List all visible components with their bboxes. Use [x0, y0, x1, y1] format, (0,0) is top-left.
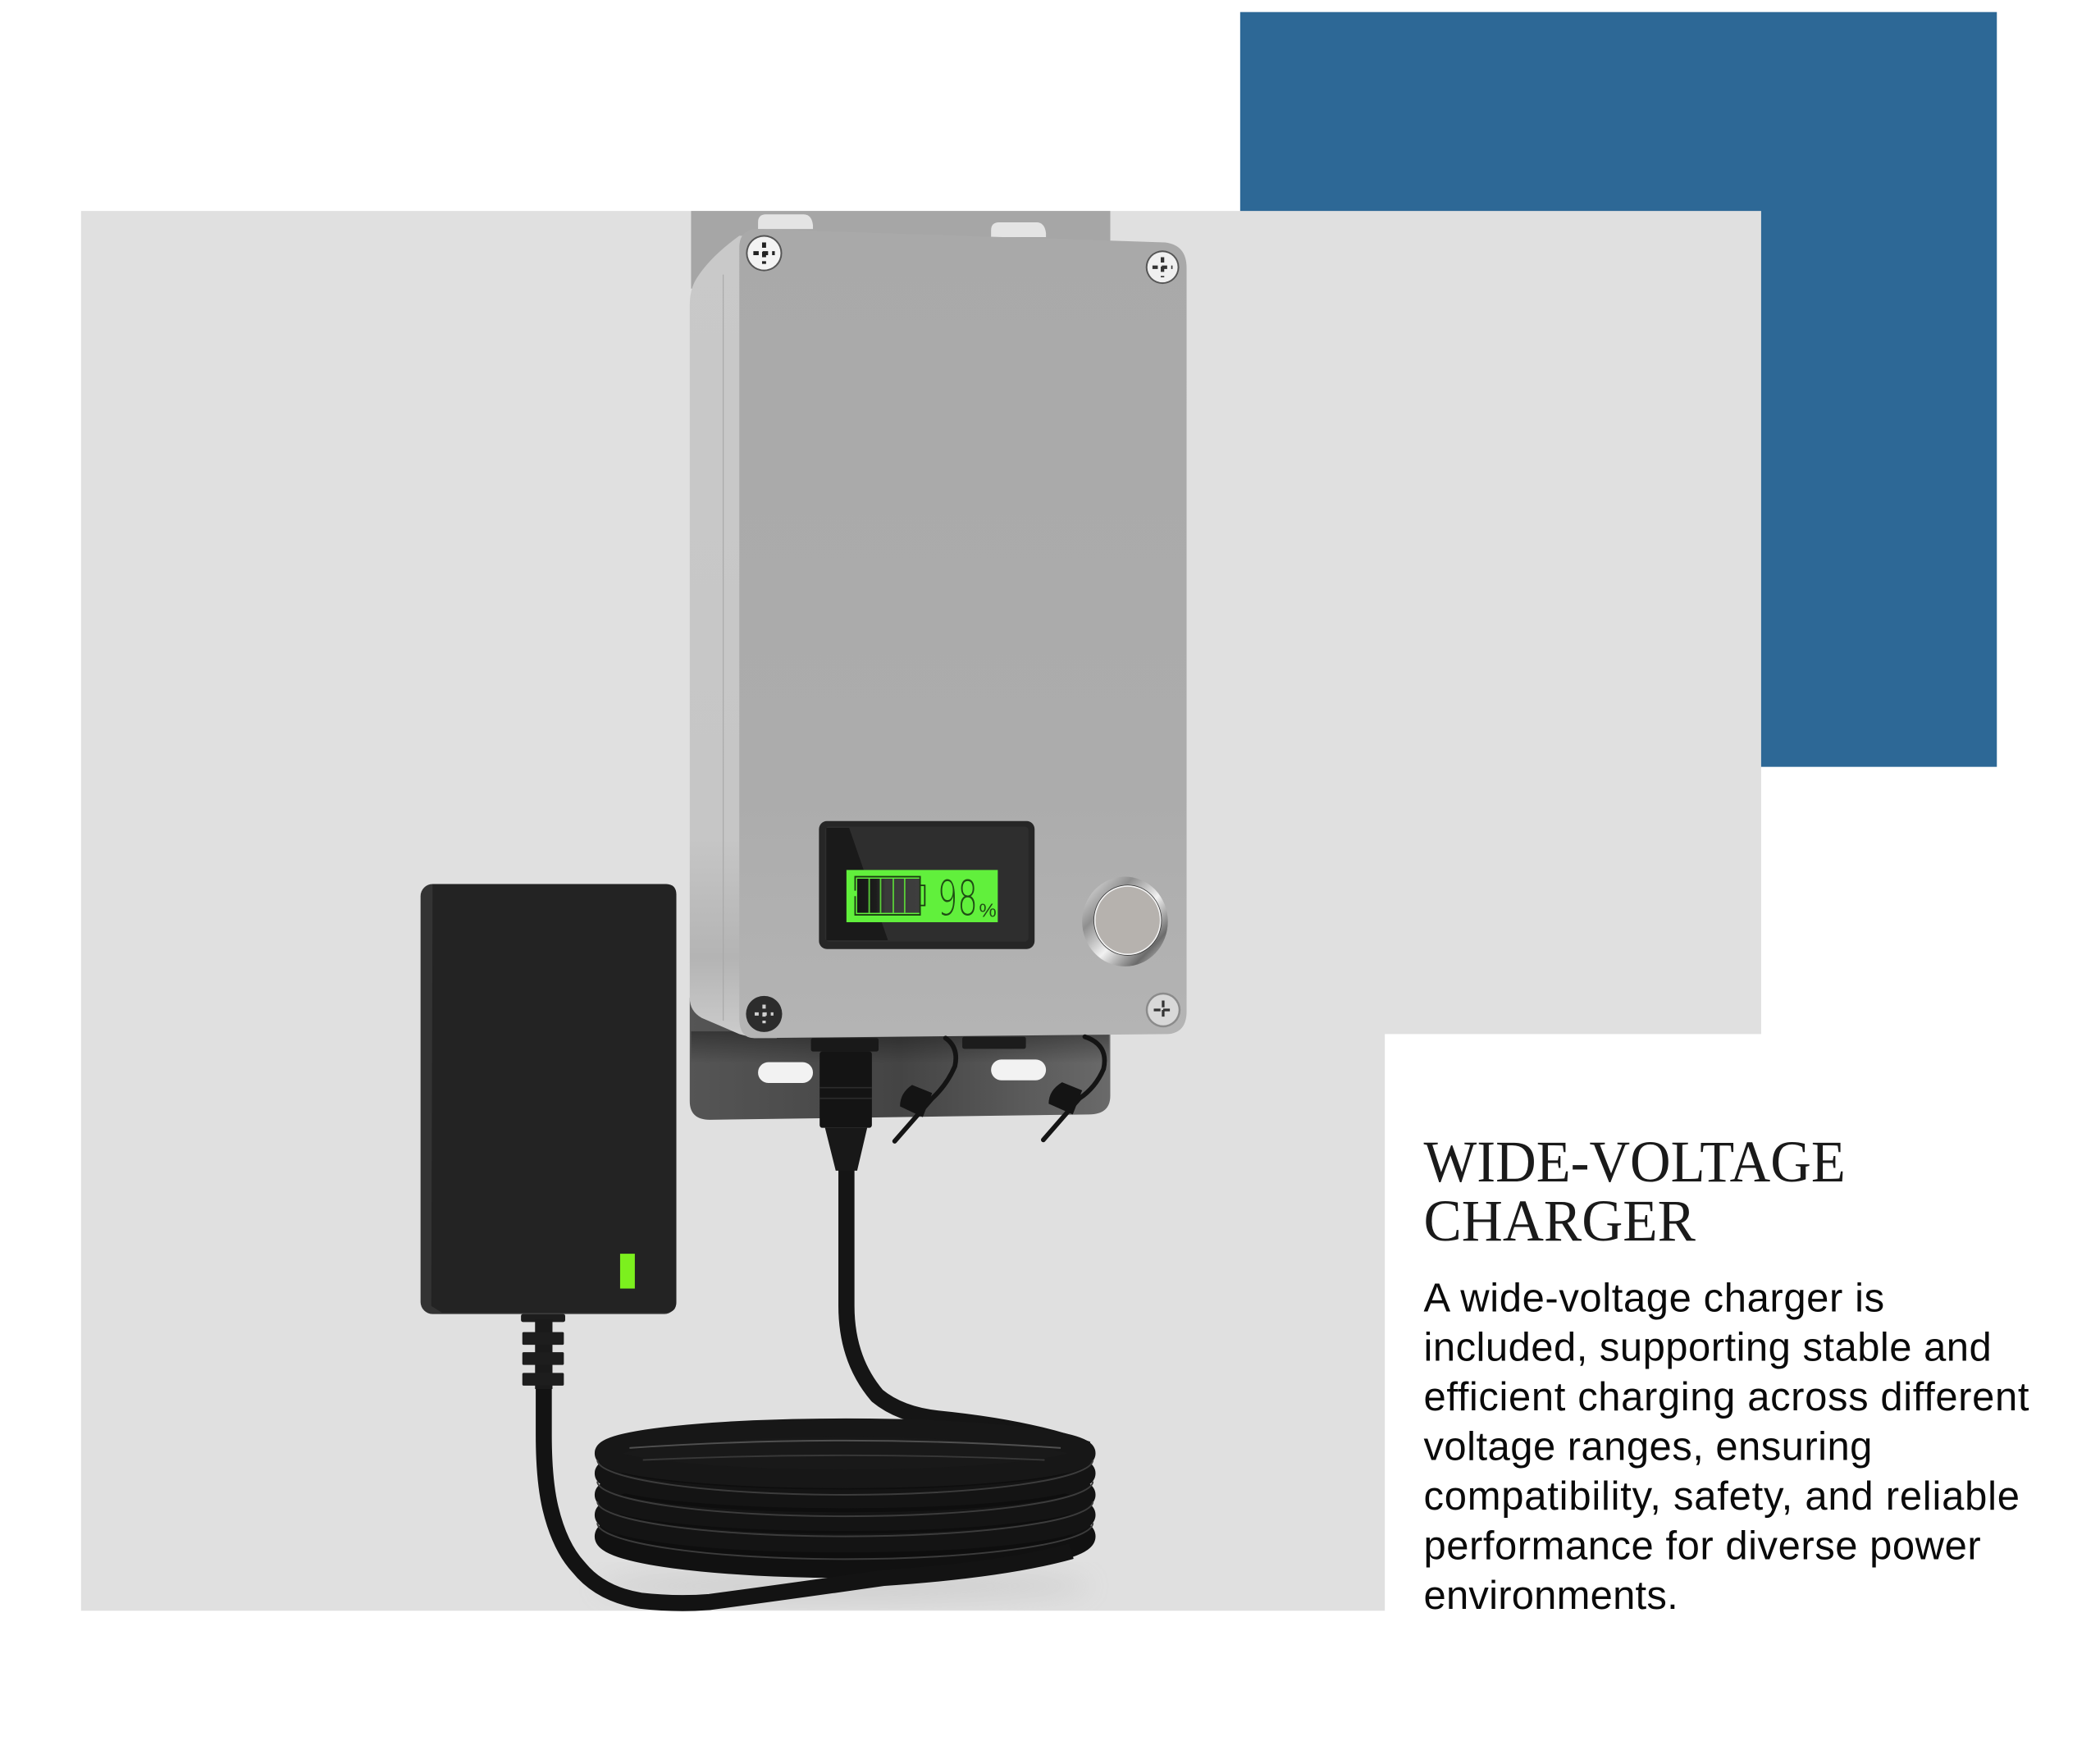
blue accent block: [1240, 12, 1997, 767]
cable coil: [597, 1428, 1093, 1569]
battery gauge icon: [855, 877, 924, 915]
dark port nut: [962, 1037, 1026, 1049]
body text: included, supporting stable and: [1423, 1326, 1992, 1370]
body text: voltage ranges, ensuring: [1423, 1425, 1872, 1469]
screw: top left: [746, 235, 782, 272]
body text: [1423, 1276, 2029, 1618]
enclosure: side wall: [690, 235, 777, 1038]
body text: efficient charging across different: [1423, 1375, 2029, 1419]
heading: WIDE-VOLTAGE: [1423, 1129, 1846, 1195]
display housing: [819, 821, 1034, 949]
display reflection: [826, 828, 888, 940]
soft shadows on the panel: [637, 1572, 1050, 1602]
ring highlights: [597, 1441, 1093, 1559]
push button: [1082, 877, 1168, 966]
grey panel: [81, 211, 1761, 1611]
screw: top right: [1146, 250, 1180, 284]
enclosure: front lid: [739, 229, 1187, 1038]
green lcd screen: [847, 870, 998, 922]
power cable to coil: [847, 1165, 1088, 1449]
charger strain relief: [521, 1314, 565, 1389]
mounting bracket: top edge: [691, 211, 1110, 289]
charger status led: [620, 1254, 635, 1289]
charging port connector: [811, 1038, 879, 1171]
heading: CHARGER: [1423, 1188, 1696, 1254]
display inset: [825, 826, 1029, 942]
body text: performance for diverse power: [1423, 1524, 1981, 1568]
charger cable to coil: [544, 1380, 1071, 1603]
heading: [1423, 1129, 1846, 1254]
body text: environments.: [1423, 1574, 1678, 1618]
body text: compatibility, safety, and reliable: [1423, 1474, 2020, 1519]
mounting bracket: bottom plate: [690, 998, 1110, 1120]
screw: bottom right: [1146, 993, 1180, 1027]
screw: bottom left: [746, 996, 782, 1032]
dust cap right: [1043, 1037, 1104, 1140]
percent sign: %: [979, 900, 997, 921]
battery display: [819, 821, 1034, 949]
charge level digits: 98: [938, 870, 978, 926]
dust cap left: [895, 1038, 956, 1141]
charger power brick: [421, 884, 677, 1314]
side seam line: [723, 275, 724, 1021]
body text: A wide-voltage charger is: [1423, 1276, 1884, 1320]
